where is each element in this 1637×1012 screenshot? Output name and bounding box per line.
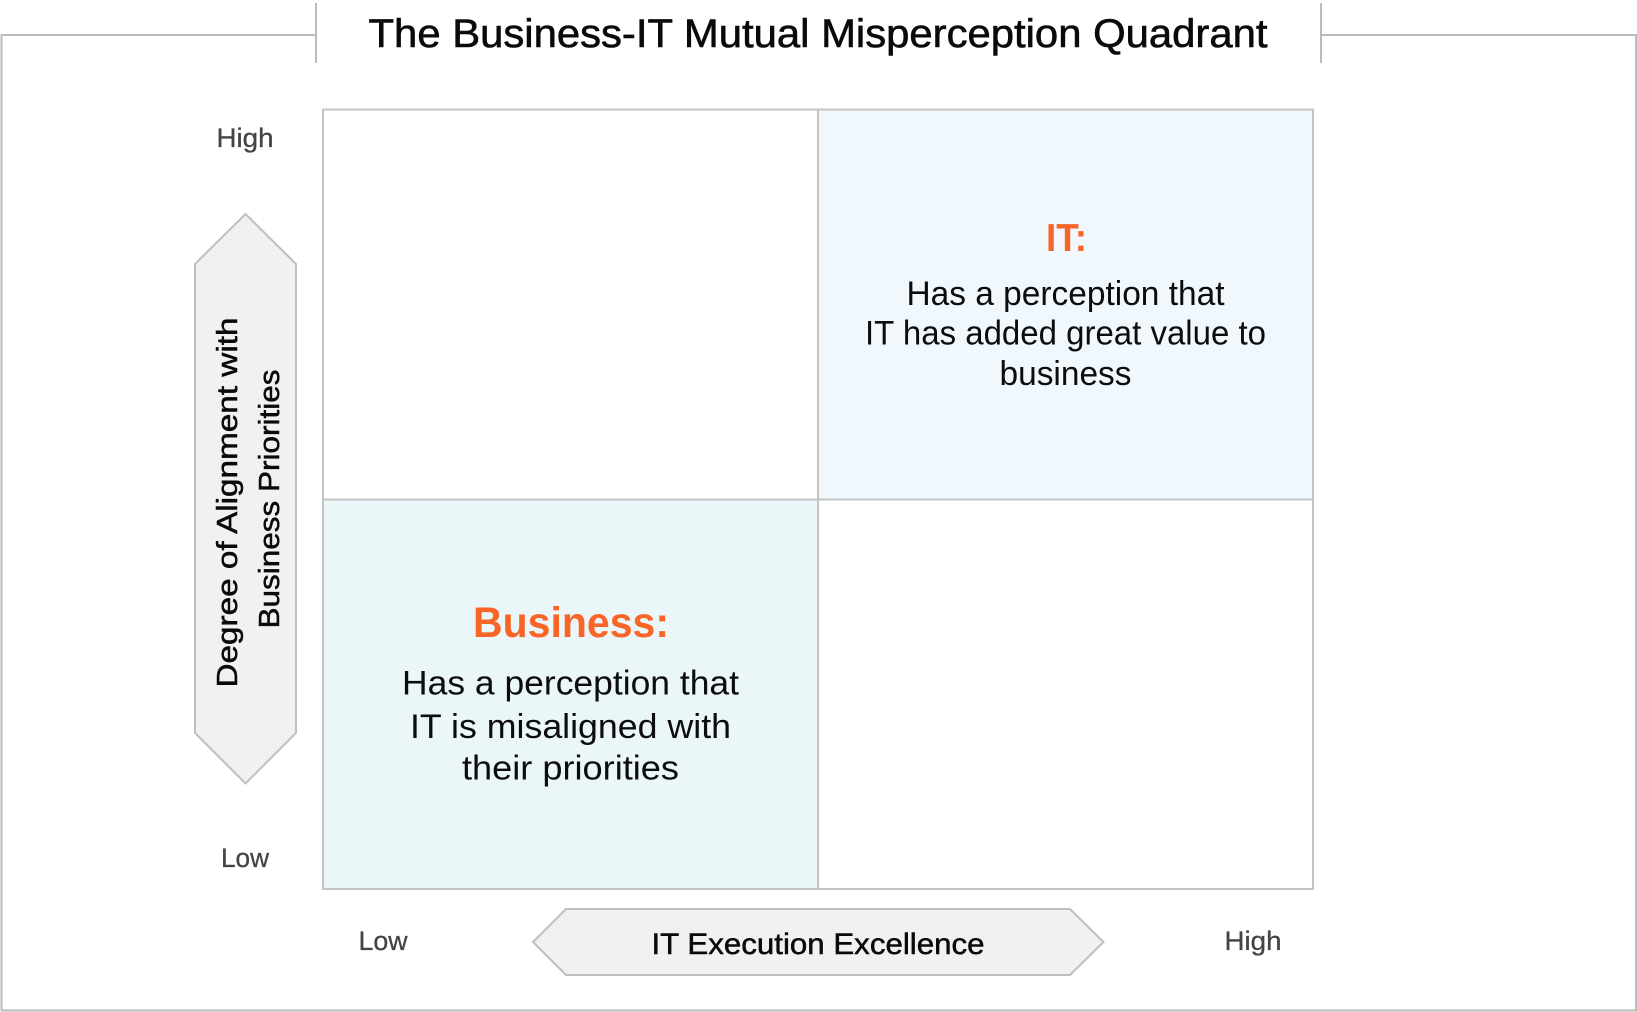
Business perception text: Has a perception that: [402, 664, 739, 702]
panel: IT quadrant: [818, 110, 1313, 500]
Business perception text: IT is misaligned with: [410, 708, 731, 746]
vertical axis label: Business Priorities: [254, 370, 286, 628]
vertical axis label: [212, 318, 286, 688]
panel: Business quadrant: [323, 500, 818, 889]
IT perception text: Has a perception that: [906, 275, 1225, 313]
title: The Business-IT Mutual Misperception Quadrant: [368, 12, 1268, 56]
panel: bottom-right quadrant: [818, 500, 1313, 889]
horizontal axis label: IT Execution Excellence: [652, 928, 984, 961]
Business perception text: their priorities: [462, 750, 679, 788]
IT perception text: IT has added great value to: [865, 314, 1266, 352]
panel: top-left quadrant: [323, 110, 818, 500]
label: vertical high: High: [216, 123, 274, 153]
quadrant grid: [323, 110, 1313, 889]
label: horizontal high: High: [1224, 926, 1282, 956]
IT heading: IT:: [1046, 217, 1087, 260]
arrow: vertical axis: [195, 214, 296, 784]
IT perception text: [865, 275, 1266, 393]
label: horizontal low: Low: [358, 926, 408, 956]
vertical axis label: Degree of Alignment with: [212, 318, 244, 688]
label: vertical low: Low: [221, 843, 270, 873]
Business heading: Business:: [473, 599, 669, 647]
Business perception text: [402, 664, 739, 788]
IT perception text: business: [1000, 355, 1132, 393]
arrow: horizontal axis: [533, 909, 1104, 975]
